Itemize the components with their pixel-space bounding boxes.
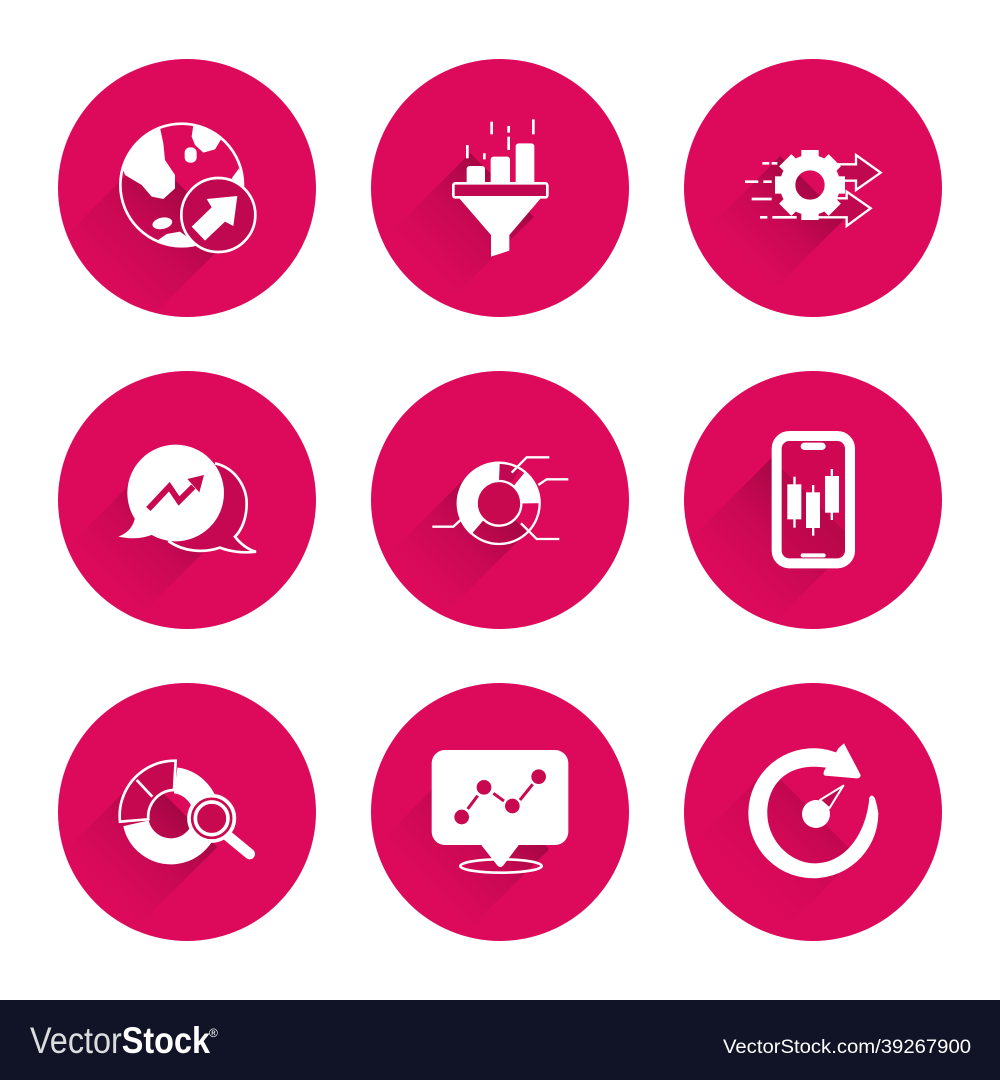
logo text: VectorStock bbox=[30, 1020, 210, 1061]
icon: location pin with line chart bbox=[432, 750, 568, 873]
panel: process gear bbox=[684, 59, 942, 317]
panel: speedometer bbox=[684, 683, 942, 941]
icon: smartphone with candlesticks bbox=[777, 436, 850, 563]
icon: funnel with bars bbox=[453, 119, 547, 257]
icon: speech bubbles with rising arrow bbox=[118, 445, 256, 552]
panel: donut search bbox=[58, 683, 316, 941]
icon: globe with up arrow bbox=[120, 124, 255, 252]
image id text: VectorStock.com/39267900 bbox=[723, 1037, 971, 1058]
panel: map pointer chart bbox=[371, 683, 629, 941]
panel: donut diagram bbox=[371, 371, 629, 629]
panel: chat growth bbox=[58, 371, 316, 629]
icon: gear with arrows bbox=[745, 150, 881, 226]
panel: mobile stock chart bbox=[684, 371, 942, 629]
icon: donut chart with magnifier bbox=[120, 761, 250, 854]
icon: speedometer with circular arrow bbox=[748, 743, 878, 878]
panel: globe growth bbox=[58, 59, 316, 317]
footer bar bbox=[0, 1000, 1000, 1080]
icon: donut chart with leader lines bbox=[432, 457, 568, 544]
registered mark: ® bbox=[209, 1026, 218, 1040]
panel: data funnel bbox=[371, 59, 629, 317]
